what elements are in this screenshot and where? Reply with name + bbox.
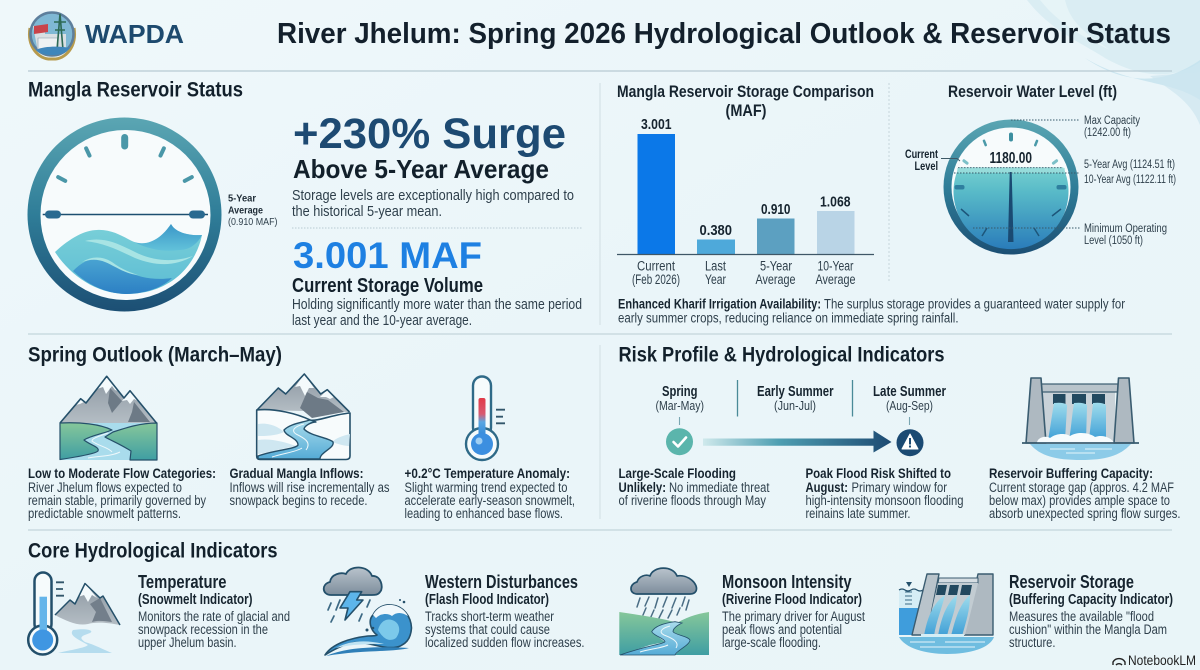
indicator: western disturbances: (Flash Flood Indicator) (425, 592, 549, 608)
bar: 5-year average (756, 202, 796, 287)
timeline: (Mar-May) (656, 399, 704, 413)
bar: last year: Year (705, 272, 726, 287)
indicator: temperature: Temperature (138, 572, 226, 592)
indicator: western disturbances (324, 567, 584, 656)
text: temperature anomaly: accelerate early-season snowmelt, (404, 493, 575, 508)
timeline (656, 380, 946, 456)
text: low to moderate flow: River Jhelum flows expected to (28, 480, 182, 495)
bar: 5-year average: Average (756, 272, 796, 287)
stat: 3.001 MAF: Current Storage Volume (292, 275, 483, 297)
gauge labels: Minimum Operating (1084, 223, 1167, 235)
timeline: (Jun-Jul) (774, 399, 816, 413)
text: flooding unlikely (618, 465, 770, 508)
label: 5-year average (228, 192, 278, 228)
indicator: temperature: (Snowmelt Indicator) (138, 592, 253, 608)
text: low to moderate flow: predictable snowmelt patterns. (28, 506, 181, 521)
timeline: Spring (662, 384, 698, 400)
indicator: reservoir storage: structure. (1009, 635, 1056, 650)
gauge labels: Current (905, 147, 938, 161)
icon: rain cloud over river valley (619, 568, 709, 655)
stat: 3.001 MAF: 3.001 MAF (293, 235, 482, 276)
text: gradual Mangla inflows: snowpack begins to recede. (230, 493, 368, 508)
bar: 10-year average: 1.068 (820, 194, 850, 210)
chart title (617, 83, 874, 120)
bar: last year (697, 223, 735, 287)
stat: +230% surge: Above 5-Year Average (293, 154, 549, 184)
timeline: (Aug-Sep) (886, 399, 933, 413)
chart title: Mangla Reservoir Storage Comparison (617, 83, 874, 101)
bar: current: 3.001 (641, 117, 672, 133)
icon: WAPDA emblem (30, 12, 74, 59)
panel: storage comparison bar chart (617, 83, 874, 287)
indicator: western disturbances: Tracks short-term weather (425, 609, 554, 624)
text: peak flood risk (806, 465, 964, 521)
text: reservoir buffering (989, 465, 1180, 521)
text: low to moderate flow (28, 465, 216, 521)
icon: thermometer and mountain (28, 572, 120, 654)
icon: check circle (666, 428, 693, 455)
text block: Kharif irrigation note (618, 296, 1125, 326)
indicator: temperature: upper Jhelum basin. (138, 635, 236, 650)
bar: 10-year average (816, 194, 856, 287)
indicator: reservoir storage (899, 572, 1173, 654)
bar: 10-year average: 10-Year (818, 258, 854, 274)
indicator: reservoir storage: Measures the available "flood (1009, 609, 1154, 624)
text: temperature anomaly (404, 465, 575, 521)
indicator: monsoon intensity: Monsoon Intensity (722, 572, 852, 592)
panel: Mangla reservoir status (28, 78, 583, 329)
bar: last year: Last (705, 258, 726, 274)
gauge labels: Max Capacity (1084, 115, 1140, 127)
gauge labels: Level (914, 159, 938, 173)
heading: Risk Profile & Hydrological Indicators (618, 344, 944, 366)
text: peak flood risk: Poak Flood Risk Shifted to (806, 465, 951, 481)
gauge: water level dial (941, 120, 1080, 254)
bar: current: Current (637, 258, 675, 274)
panel: spring outlook (28, 344, 575, 521)
text: low to moderate flow: Low to Moderate Flow Categories: (28, 465, 216, 481)
text block: Kharif irrigation note: The surplus storage provides a guaranteed water supply for (824, 296, 1125, 312)
icon: thermometer (466, 376, 505, 460)
icon: dam with water level scale (899, 574, 994, 654)
gauge: water level dial: 1180.00 (990, 150, 1032, 167)
stat: +230% surge: +230% Surge (293, 110, 566, 158)
label: 5-year average: (0.910 MAF) (228, 216, 278, 228)
wordmark: WAPDA (85, 19, 184, 49)
panel: risk profile (618, 344, 1180, 521)
title: River Jhelum: Spring 2026 Hydrological Outlook & Reservoir Status (277, 18, 1171, 50)
icon: mountains with green valley (60, 376, 157, 460)
stat: +230% surge (292, 110, 574, 220)
indicator: western disturbances: Western Disturbances (425, 572, 578, 592)
label: 5-year average: Average (228, 204, 263, 216)
gauge labels (905, 115, 1176, 247)
heading: Core Hydrological Indicators (28, 540, 278, 562)
indicator: temperature (28, 572, 290, 654)
header: WAPDA logo (30, 12, 184, 59)
text: peak flood risk: Primary window for (852, 480, 947, 495)
indicator: reservoir storage: cushion" within the Mangla Dam (1009, 622, 1167, 637)
heading: Spring Outlook (March–May) (28, 344, 282, 366)
text: low to moderate flow: remain stable, primarily governed by (28, 493, 206, 508)
panel: core hydrological indicators (28, 540, 1173, 656)
timeline: Early Summer (757, 384, 834, 400)
arrow (703, 430, 892, 452)
gauge heading: Reservoir Water Level (ft) (948, 83, 1117, 101)
panel: reservoir water level gauge (905, 83, 1176, 254)
indicator: western disturbances: localized sudden flow increases. (425, 635, 584, 650)
text: gradual Mangla inflows: Gradual Mangla Inflows: (230, 465, 364, 481)
text: temperature anomaly: leading to enhanced base flows. (404, 506, 563, 521)
gauge labels: 5-Year Avg (1124.51 ft) (1084, 159, 1175, 171)
text: peak flood risk: reinains late summer. (806, 506, 910, 521)
text: peak flood risk: high-intensity monsoon flooding (806, 493, 964, 508)
gauge: reservoir dial (28, 118, 222, 312)
indicator: temperature: Monitors the rate of glacial and (138, 609, 290, 624)
text: gradual Mangla inflows (230, 465, 390, 508)
label: 5-year average: 5-Year (228, 192, 256, 204)
icon: warning circle (896, 429, 924, 456)
bar: 5-year average: 0.910 (761, 202, 790, 218)
icon: dam spillway (1022, 378, 1139, 460)
heading: Mangla Reservoir Status (28, 78, 243, 102)
bar: current (632, 117, 680, 287)
text: flooding unlikely: Large-Scale Flooding (618, 465, 736, 481)
indicator: monsoon intensity: The primary driver for August (722, 609, 865, 624)
indicator: reservoir storage: Reservoir Storage (1009, 572, 1134, 592)
bar: 5-year average: 5-Year (760, 258, 792, 274)
text: gradual Mangla inflows: Inflows will rise incrementally as (230, 480, 390, 495)
text block: Kharif irrigation note: early summer crops, reducing reliance on immediate spring rainfall. (618, 310, 958, 326)
stat: 3.001 MAF (292, 235, 582, 329)
stat: +230% surge: Storage levels are exceptionally high compared to (292, 188, 574, 204)
text: flooding unlikely: No immediate threat (669, 480, 770, 495)
indicator: monsoon intensity: peak flows and potential (722, 622, 842, 637)
text: flooding unlikely: Unlikely: (618, 479, 666, 495)
bar: 10-year average: Average (816, 272, 856, 287)
indicator: temperature: snowpack recession in the (138, 622, 268, 637)
text: reservoir buffering: Reservoir Buffering Capacity: (989, 465, 1153, 481)
text: flooding unlikely: of riverine floods through May (618, 493, 766, 508)
text: temperature anomaly: Slight warming trend expected to (404, 480, 568, 495)
stat: 3.001 MAF: last year and the 10-year average. (292, 313, 472, 329)
bar: current: (Feb 2026) (632, 272, 680, 287)
timeline: Late Summer (873, 384, 946, 400)
chart title: (MAF) (726, 102, 766, 120)
icon: storm cloud and wave (324, 567, 412, 656)
indicator: western disturbances: systems that could cause (425, 622, 550, 637)
gauge labels: Level (1050 ft) (1084, 235, 1143, 247)
bar: last year: 0.380 (700, 223, 732, 239)
indicator: monsoon intensity (619, 568, 865, 655)
stat: 3.001 MAF: Holding significantly more water than the same period (292, 297, 582, 313)
indicator: monsoon intensity: large-scale flooding. (722, 635, 821, 650)
stat: +230% surge: the historical 5-year mean. (292, 204, 442, 220)
icon: snowy mountain with river (257, 374, 350, 460)
text: peak flood risk: August: (806, 479, 848, 495)
indicator: monsoon intensity: (Riverine Flood Indicator) (722, 592, 862, 608)
text: temperature anomaly: +0.2°C Temperature Anomaly: (404, 465, 570, 481)
text block: Kharif irrigation note: Enhanced Kharif Irrigation Availability: (618, 296, 821, 312)
gauge labels: (1242.00 ft) (1084, 127, 1131, 139)
